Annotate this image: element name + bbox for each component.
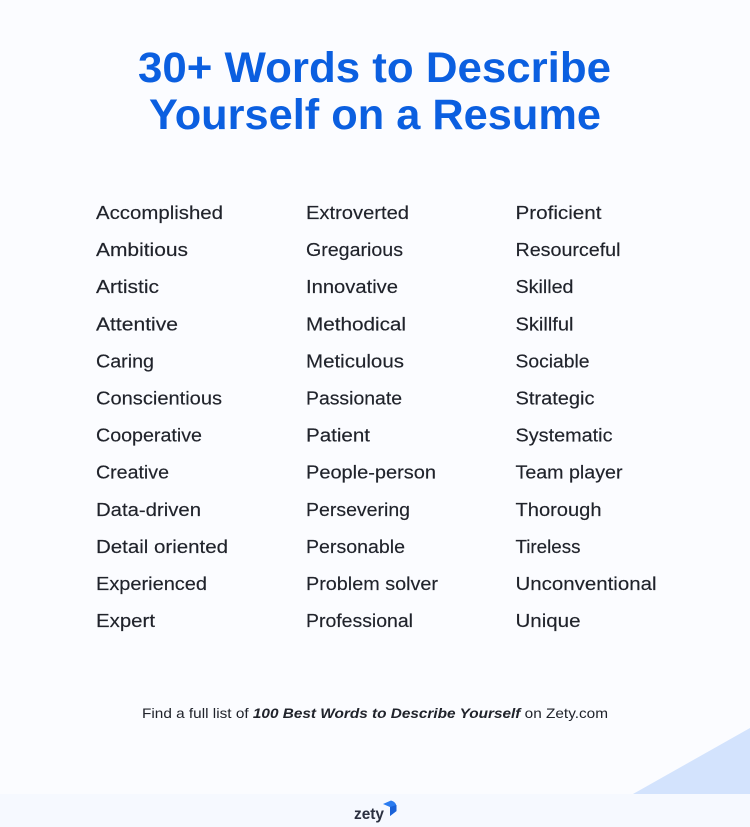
decorative corner triangle: [633, 728, 750, 794]
icon: zety arrow mark: [383, 800, 396, 816]
word list column 3: Resourceful: [516, 240, 620, 260]
word list column 1: Cooperative: [96, 426, 202, 446]
footer note: Find a full list of 100 Best Words to Describe Yourself on Zety.com: [142, 705, 608, 721]
word list column 3: Unique: [516, 611, 580, 631]
word list column 1: Ambitious: [96, 240, 188, 260]
word list column 2: Patient: [306, 426, 370, 446]
word list column 2: Personable: [306, 537, 405, 557]
zety logo: zety: [354, 806, 384, 823]
word list column 3: Strategic: [516, 388, 594, 408]
word list column 1: Experienced: [96, 574, 207, 594]
word list column 2: Methodical: [306, 314, 406, 334]
word list column 3: Sociable: [516, 351, 590, 371]
word list column 2: Meticulous: [306, 351, 404, 371]
word list column 3: Thorough: [516, 500, 602, 520]
word list column 3: Skilled: [516, 277, 574, 297]
word list column 2: Professional: [306, 611, 413, 631]
word list column 1: [96, 203, 228, 631]
word list column 1: Accomplished: [96, 203, 223, 223]
footer band: [0, 794, 750, 827]
zety logo: [354, 800, 396, 823]
word list column 2: Innovative: [306, 277, 398, 297]
word list column 3: Unconventional: [516, 574, 656, 594]
word list column 3: [516, 203, 656, 631]
word list column 1: Expert: [96, 611, 155, 631]
word list column 3: Systematic: [516, 426, 612, 446]
word list column 3: Team player: [516, 463, 623, 483]
word list column 1: Artistic: [96, 277, 159, 297]
word list column 3: Skillful: [516, 314, 574, 334]
word list column 1: Attentive: [96, 314, 178, 334]
word list column 2: Problem solver: [306, 574, 438, 594]
word list column 1: Conscientious: [96, 388, 222, 408]
word list column 2: [306, 203, 438, 631]
word list column 1: Data-driven: [96, 500, 201, 520]
word list column 1: Detail oriented: [96, 537, 228, 557]
word list column 2: Extroverted: [306, 203, 409, 223]
word list column 1: Caring: [96, 351, 154, 371]
word list column 3: Proficient: [516, 203, 602, 223]
title: Yourself on a Resume: [149, 91, 601, 139]
word list column 2: Passionate: [306, 388, 402, 408]
title: 30+ Words to Describe: [138, 44, 611, 92]
word list column 3: Tireless: [516, 537, 580, 557]
title: [138, 44, 611, 139]
word list column 1: Creative: [96, 463, 169, 483]
word list column 2: Gregarious: [306, 240, 403, 260]
word list column 2: Persevering: [306, 500, 410, 520]
word list column 2: People-person: [306, 463, 436, 483]
